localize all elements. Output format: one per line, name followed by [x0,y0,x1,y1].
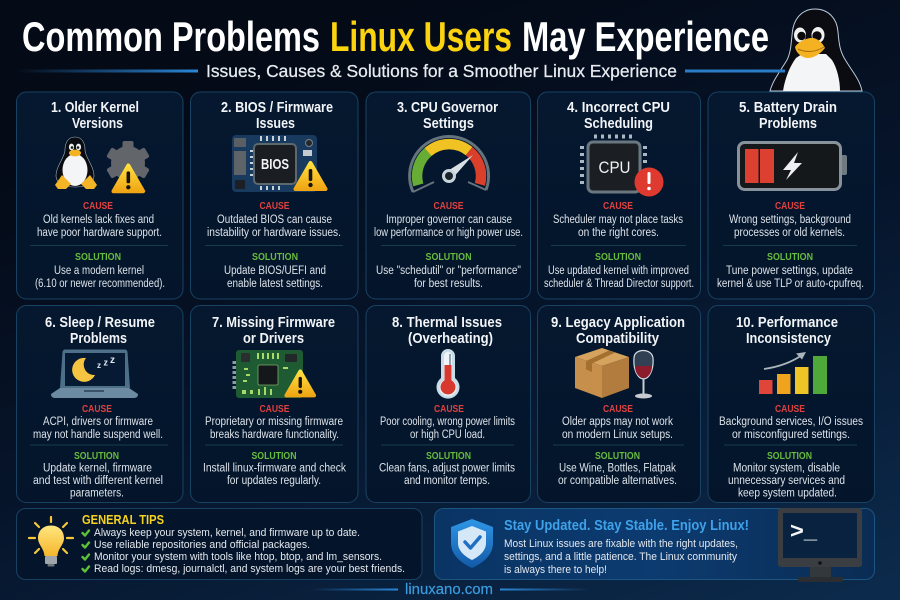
solution label: SOLUTION [426,251,472,263]
icon: rising bar chart [759,352,827,394]
card title: Scheduling [584,115,653,132]
icon: shield with check [451,519,493,568]
card title: or Drivers [243,330,304,347]
cause text: on the right cores. [578,227,659,239]
icon: light bulb [29,517,73,566]
icon: CPU chip with alert: CPU [598,159,630,177]
solution text: Tune power settings, update [726,265,853,277]
tips list: Always keep your system, kernel, and firmware up to date. [94,527,360,539]
cause label: CAUSE [775,200,805,212]
card title [397,99,498,132]
solution text [717,265,864,290]
cause label: CAUSE [434,403,464,415]
solution text [224,265,326,290]
solution text: scheduler & Thread Director support. [544,278,694,290]
solution label: SOLUTION [595,251,641,263]
solution text: Use "schedutil" or "performance" [376,265,521,277]
cause text: have poor hardware support. [37,227,162,239]
cause text: breaks hardware functionality. [210,429,339,441]
panel: card 10 performance inconsistency [708,306,874,502]
cause label: CAUSE [82,403,112,415]
cause text [207,214,341,239]
card title: Settings [423,115,474,132]
card title [392,314,502,347]
cause text [205,416,343,441]
card title: Issues [256,115,295,132]
card title: 1. Older Kernel [51,99,139,116]
solution text: Use Wine, Bottles, Flatpak [559,462,676,474]
cause text [729,214,851,239]
solution text: keep system updated. [738,488,837,500]
solution label: SOLUTION [595,450,640,462]
cause label: CAUSE [260,200,290,212]
panel: card 7 missing firmware or drivers [190,306,358,502]
tips list [82,527,405,575]
card title [567,99,670,132]
cause label: CAUSE [603,200,633,212]
icon: large penguin mascot [770,9,862,91]
solution text [728,462,845,500]
icon: penguin, gear and warning [55,137,150,191]
icon: terminal monitor: >_ [790,518,818,543]
panel: general tips [16,508,422,580]
panel: card 2 BIOS firmware issues [190,92,358,299]
cause text: processes or old kernels. [734,227,845,239]
cause text: Poor cooling, wrong power limits [380,416,515,428]
solution label: SOLUTION [252,251,298,263]
solution text: for best results. [414,278,483,290]
card title [45,314,155,347]
solution text: Monitor system, disable [733,462,840,474]
card title: Problems [70,330,127,347]
card title: 4. Incorrect CPU [567,99,670,116]
solution text: kernel & use TLP or auto-cpufreq. [717,278,864,290]
card title [736,314,838,347]
card title [551,314,685,347]
cause text: or high CPU load. [410,429,485,441]
solution label: SOLUTION [252,450,296,462]
card title: 9. Legacy Application [551,314,685,331]
icon: cardboard box and wine glass [575,348,653,398]
solution text: parameters. [70,488,124,500]
cause text: Scheduler may not place tasks [553,214,683,226]
card title: Versions [72,115,123,132]
cause text: Outdated BIOS can cause [217,214,332,226]
solution text [379,462,515,487]
icon: thermometer [437,349,460,399]
panel: card 3 CPU governor settings [366,92,530,299]
solution label: SOLUTION [75,251,121,263]
icon: low battery [738,142,847,190]
solution text: Use updated kernel with improved [548,265,689,277]
solution text: unnecessary services and [728,475,845,487]
card title: 7. Missing Firmware [212,314,335,331]
cause text: Wrong settings, background [729,214,851,226]
cause label: CAUSE [83,200,113,212]
cause text [553,214,683,239]
cause text [33,416,163,441]
solution label: SOLUTION [426,450,471,462]
card title: Compatibility [576,330,660,347]
tips list: Read logs: dmesg, journalctl, and system logs are your best friends. [94,563,405,575]
solution text [376,265,521,290]
panel: card 9 legacy application compatibility [538,306,700,502]
cause text [562,416,673,441]
icon: BIOS chip board and warning [232,135,326,192]
icon: circuit board and warning [232,350,314,398]
cause text [380,416,515,441]
title [22,13,769,60]
subtitle [15,61,785,81]
cause label: CAUSE [603,403,633,415]
solution text: (6.10 or newer recommended). [35,278,165,290]
icon: BIOS chip board and warning: BIOS [261,156,289,173]
panel: card 5 battery drain problems [708,92,874,299]
solution text: and test with different kernel [33,475,163,487]
cause text: Improper governor can cause [386,214,512,226]
solution text: Install linux-firmware and check [203,462,346,474]
solution text [558,462,677,487]
solution text: Update kernel, firmware [43,462,152,474]
tips list: Use reliable repositories and official packages. [94,539,310,551]
card title: 10. Performance [736,314,838,331]
card title [212,314,335,347]
panel: stay updated callout [434,508,874,582]
card title: 6. Sleep / Resume [45,314,155,331]
solution label: SOLUTION [767,251,813,263]
card title [739,99,837,132]
cause text: may not handle suspend well. [33,429,163,441]
cause label: CAUSE [434,200,464,212]
tips heading: GENERAL TIPS [82,512,164,527]
cause text: instability or hardware issues. [207,227,341,239]
cause text [719,416,863,441]
panel: card 4 incorrect CPU scheduling [538,92,700,299]
callout text: is always there to help! [504,564,607,576]
card title: Inconsistency [746,330,832,347]
title: Common Problems [22,13,320,60]
title: Linux Users [330,13,512,60]
icon: sleeping laptop [51,350,138,398]
cause text: on modern Linux setups. [562,429,673,441]
icon: terminal monitor [778,508,862,582]
cause text: low performance or high power use. [374,227,523,239]
card title: 2. BIOS / Firmware [221,99,333,116]
cause text [37,214,162,239]
cause text [374,214,523,239]
icon: sleeping laptop: z [110,355,115,366]
solution text [33,462,163,500]
solution text: Clean fans, adjust power limits [379,462,515,474]
callout text: settings, and a little patience. The Linux community [504,551,737,563]
solution text: Use a modern kernel [54,265,144,277]
cause text: Proprietary or missing firmware [205,416,343,428]
cause text: Background services, I/O issues [719,416,863,428]
solution text [203,462,346,487]
solution text: and monitor temps. [404,475,490,487]
cause label: CAUSE [260,403,290,415]
panel: card 8 thermal issues [366,306,530,502]
icon: sleeping laptop: z [97,361,101,370]
cause label: CAUSE [775,403,805,415]
card title: (Overheating) [408,330,493,347]
card title [221,99,333,132]
card title [51,99,139,132]
panel: card 6 sleep resume problems [16,306,183,502]
cause text: Older apps may not work [562,416,673,428]
icon: speedometer gauge [410,136,489,192]
solution label: SOLUTION [767,450,812,462]
solution text: Update BIOS/UEFI and [224,265,326,277]
subtitle: Issues, Causes & Solutions for a Smoother Linux Experience [206,61,677,81]
callout text: Most Linux issues are fixable with the right updates, [504,538,738,550]
solution text [544,265,694,290]
card title: 5. Battery Drain [739,99,837,116]
solution text: enable latest settings. [227,278,323,290]
callout text [504,538,738,576]
panel: card 1 older kernel versions [16,92,183,299]
card title: Problems [759,115,817,132]
solution text [35,265,165,290]
card title: 3. CPU Governor [397,99,498,116]
cause text: Old kernels lack fixes and [43,214,154,226]
callout heading: Stay Updated. Stay Stable. Enjoy Linux! [504,517,749,534]
tips list: Monitor your system with tools like htop, btop, and lm_sensors. [94,551,382,563]
solution label: SOLUTION [74,450,119,462]
card title: 8. Thermal Issues [392,314,502,331]
cause text: or misconfigured settings. [732,429,850,441]
footer website: linuxano.com [405,581,493,598]
icon: sleeping laptop: z [104,358,108,368]
icon: CPU chip with alert [580,134,664,196]
solution text: or compatible alternatives. [558,475,677,487]
solution text: for updates regularly. [227,475,321,487]
title: May Experience [522,13,769,60]
cause text: ACPI, drivers or firmware [43,416,153,428]
